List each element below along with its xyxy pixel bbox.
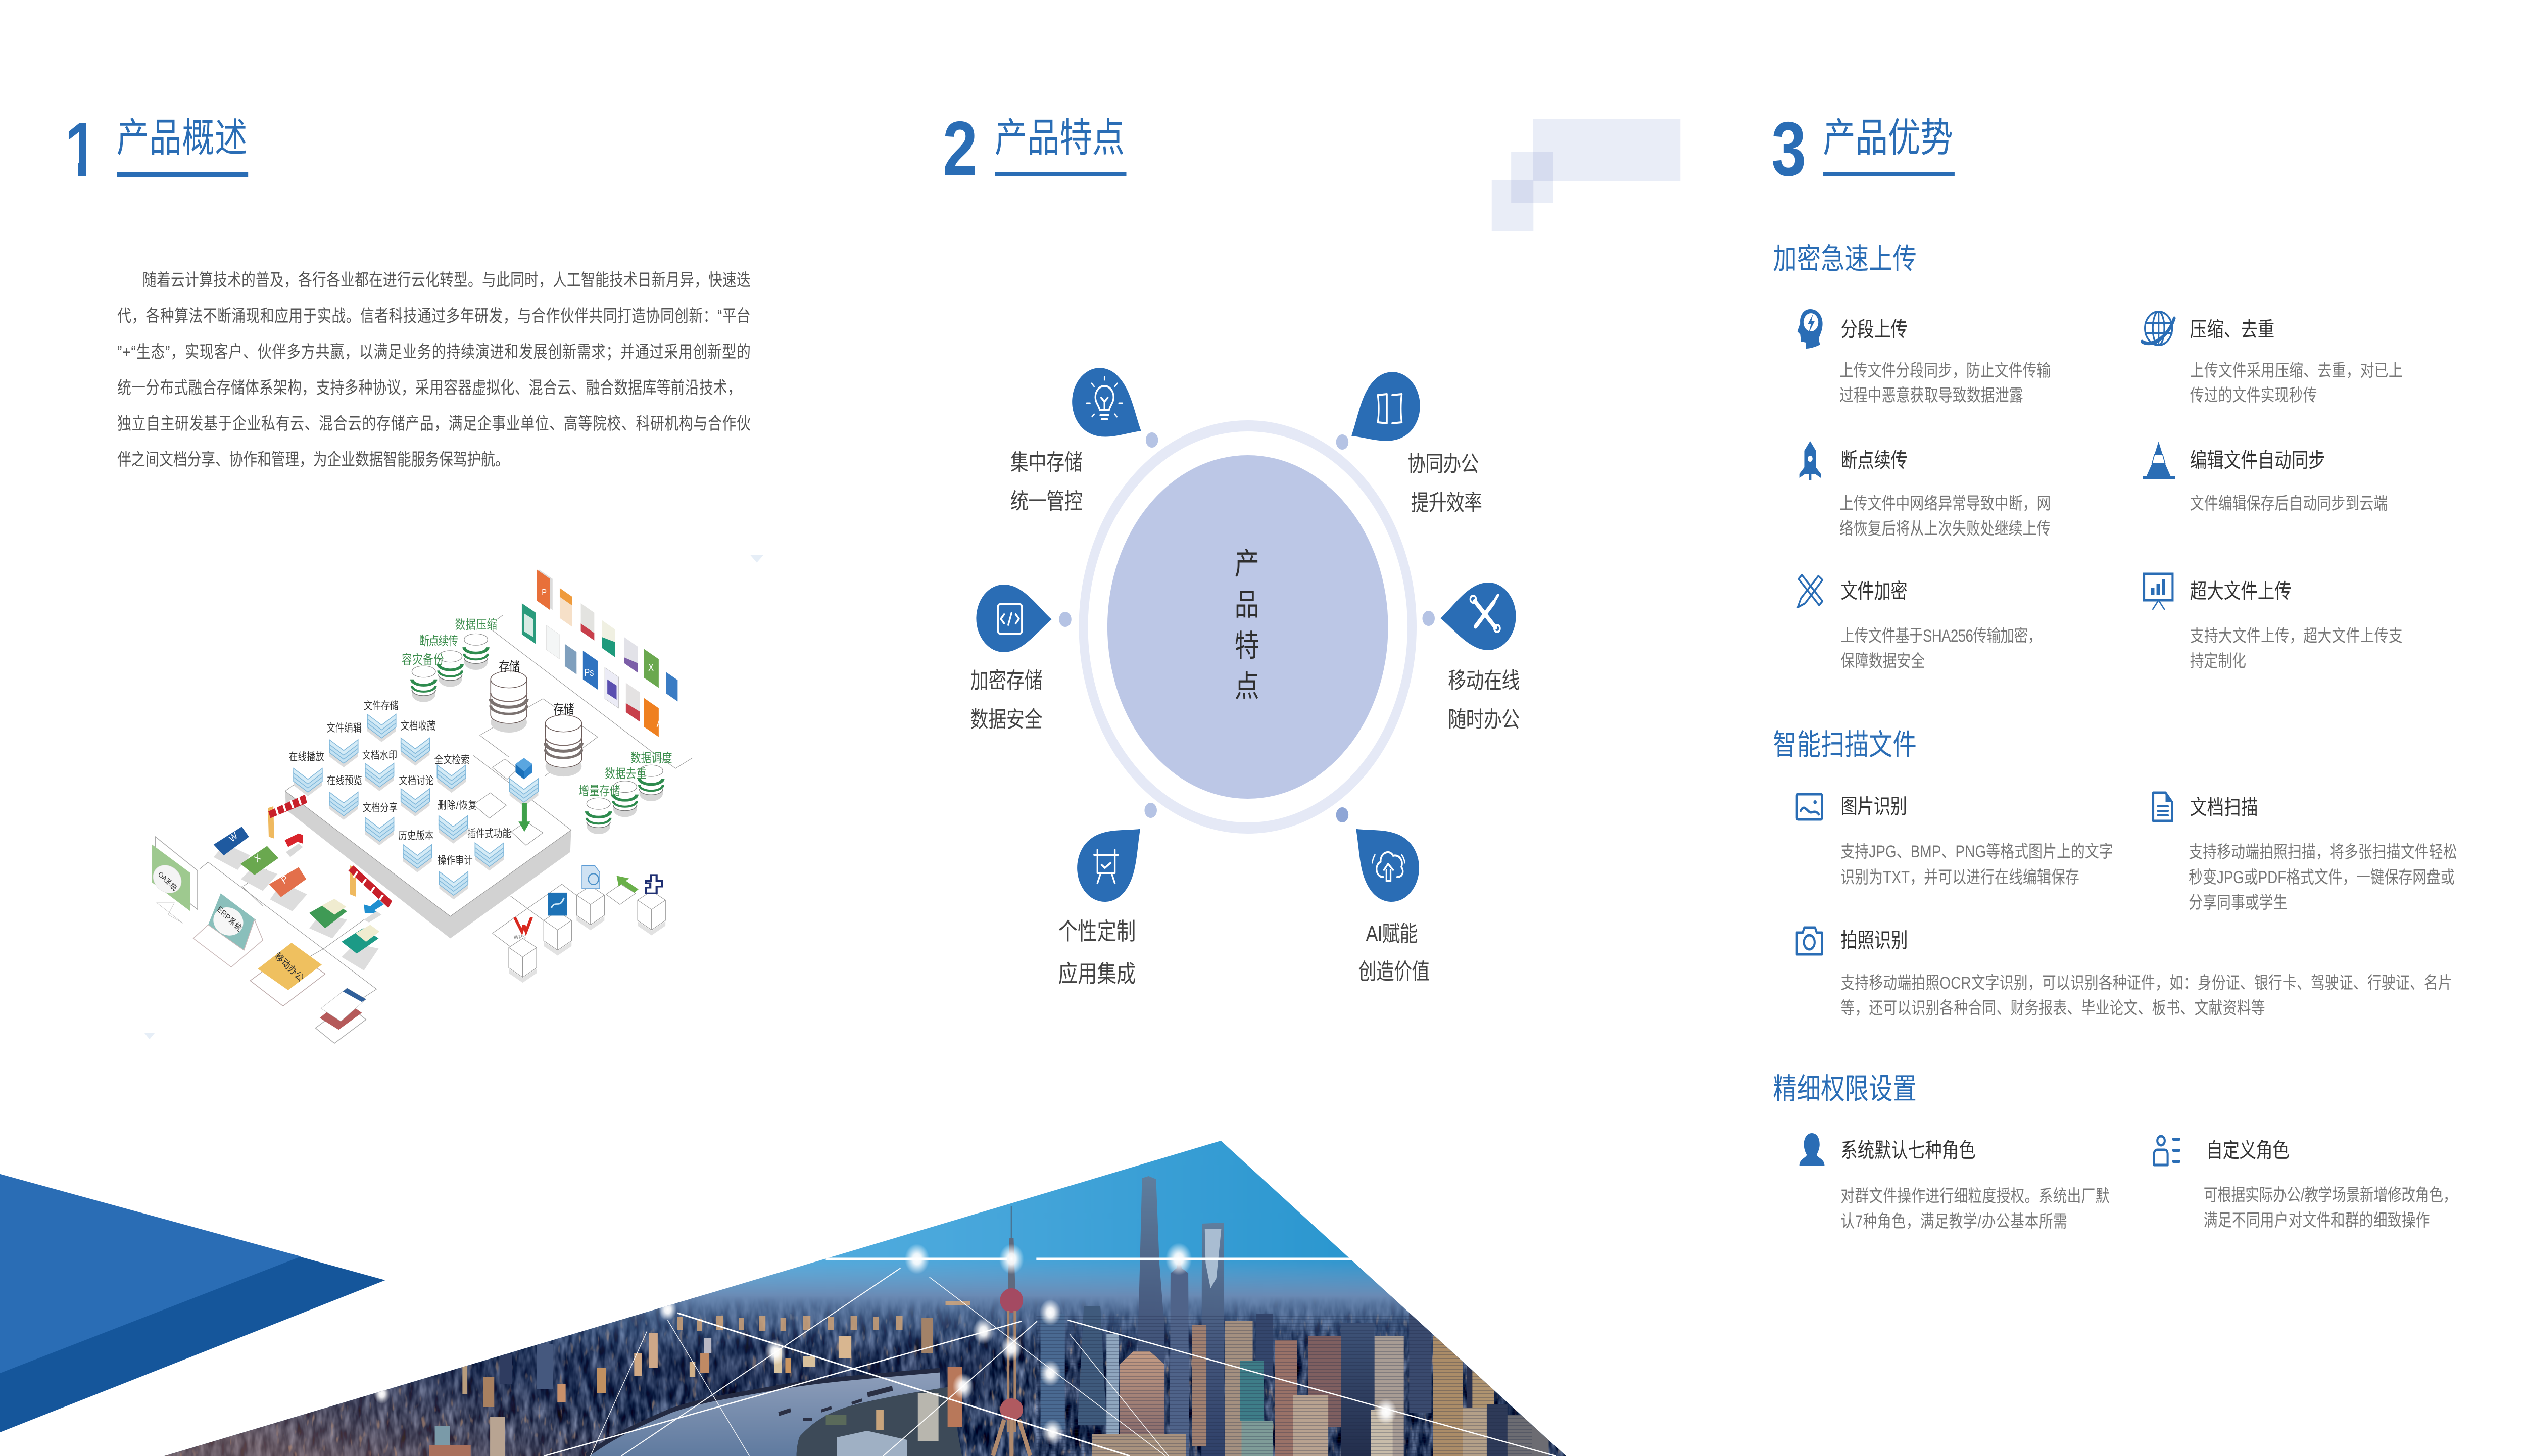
panel: product features: [943, 106, 1680, 988]
center label: [1235, 547, 1259, 703]
diagram labels: 文档分享: [363, 802, 398, 814]
text: 秒变JPG或PDF格式文件，一键保存网盘或: [2189, 867, 2455, 887]
decorative squares: [1492, 119, 1680, 231]
diagram labels: P: [279, 872, 289, 886]
foreground towers: [1040, 1306, 1549, 1456]
icon: pencil and ruler: [1798, 575, 1822, 607]
section number 3: 3: [1771, 106, 1806, 192]
horizon haze: [164, 1258, 1568, 1296]
text: 支持移动端拍照OCR文字识别，可以识别各种证件，如：身份证、银行卡、驾驶证、行驶证、名片: [1840, 973, 2452, 993]
label: 移动在线: [1448, 668, 1520, 693]
drop marker: [1062, 356, 1155, 460]
text: 分享同事或学生: [2189, 893, 2288, 912]
label: 统一管控: [1010, 489, 1083, 514]
text: 文件编辑保存后自动同步到云端: [2190, 494, 2388, 513]
puxi lit towers: [429, 1318, 962, 1456]
diagram labels: 插件式功能: [467, 828, 511, 840]
text: 图片识别: [1840, 795, 1907, 818]
isometric storage architecture diagram: [144, 555, 763, 1043]
group: fine-grained permissions: [1773, 1073, 2457, 1231]
text: 分段上传: [1840, 318, 1908, 341]
storage cylinders: [491, 671, 581, 776]
floating file cards: [214, 827, 379, 970]
icon: globe: [2142, 312, 2174, 345]
feature: encrypted storage: [970, 584, 1052, 732]
connector dots: [1059, 432, 1435, 822]
jin mao tower: [1170, 1253, 1189, 1456]
text: 压缩、去重: [2190, 318, 2274, 341]
label: 个性定制: [1058, 918, 1136, 945]
text: 识别为TXT，并可以进行在线编辑保存: [1840, 867, 2079, 887]
icon: role list: [2154, 1136, 2180, 1165]
center label: 产: [1235, 547, 1259, 581]
barriers: [268, 795, 392, 908]
text: [2190, 579, 2403, 671]
diagram labels: 历史版本: [399, 830, 433, 842]
text: 络恢复后将从上次失败处继续上传: [1839, 519, 2051, 539]
icon: document: [2153, 793, 2172, 821]
text: 编辑文件自动同步: [2190, 449, 2325, 472]
diagram labels: 文件编辑: [326, 722, 362, 734]
section number 1: 1: [64, 107, 100, 192]
left systems: OA, ERP, mobile: [149, 837, 366, 1043]
river boats: [779, 1386, 893, 1421]
drop marker: [1066, 804, 1159, 916]
text: [1839, 449, 2051, 539]
subheading: 智能扫描文件: [1773, 729, 1917, 761]
icon: rocket: [1800, 441, 1821, 480]
icon: presentation chart: [2144, 574, 2172, 609]
integration cubes and icons: [509, 865, 665, 983]
river bank: [587, 1370, 940, 1456]
city texture: [164, 1296, 1568, 1456]
heading: product overview: 产品概述: [116, 116, 248, 161]
label: 数据安全: [970, 707, 1043, 732]
label: [1358, 921, 1430, 984]
text: 支持移动端拍照扫描，将多张扫描文件轻松: [2189, 842, 2457, 862]
group: smart scanning: [1773, 729, 2457, 1018]
text: [2190, 449, 2388, 513]
file type icons: [522, 569, 677, 737]
icon: tools: [1470, 595, 1500, 632]
text: 文档扫描: [2190, 796, 2258, 819]
drop marker: [1337, 804, 1431, 916]
drop marker: [976, 584, 1052, 653]
feature: mobile office: [1440, 581, 1520, 732]
heading underline: [995, 172, 1126, 176]
light flares: [374, 1243, 1397, 1445]
diagram labels: 文件存储: [364, 700, 399, 712]
label: AI赋能: [1366, 921, 1418, 946]
text: 上传文件分段同步，防止文件传输: [1839, 361, 2051, 380]
icon: head with bolt: [1798, 309, 1823, 349]
oriental pearl tower: [993, 1206, 1030, 1456]
text: 保障数据安全: [1840, 651, 1925, 671]
label: 应用集成: [1058, 961, 1136, 988]
diagram labels: OA系统: [157, 870, 178, 893]
diagram labels: 在线播放: [289, 751, 324, 763]
distant lit buildings: [677, 1301, 970, 1331]
blue cube: [515, 758, 532, 779]
label: [1010, 450, 1083, 514]
green data cylinders: [412, 634, 663, 834]
network lines: [544, 1259, 1556, 1456]
text: 上传文件中网络异常导致中断，网: [1839, 494, 2051, 513]
text: 可根据实际办公/教学场景新增修改角色，: [2204, 1185, 2457, 1205]
label: 集中存储: [1010, 450, 1083, 475]
shanghai tower: [1138, 1176, 1165, 1456]
overview paragraph: [117, 270, 751, 469]
diagram shapes: [144, 555, 763, 1043]
icon: picture: [1797, 794, 1822, 819]
diagram labels: 数据压缩: [455, 617, 497, 632]
panel: product advantages: [1771, 106, 2457, 1231]
center label: 点: [1235, 669, 1259, 703]
label: 创造价值: [1358, 959, 1430, 984]
heading: product features: 产品特点: [995, 116, 1125, 161]
text: 断点续传: [1840, 449, 1908, 472]
storage tier outlines: [200, 615, 693, 1018]
icon: person: [1800, 1133, 1824, 1166]
text: 等，还可以识别各种合同、财务报表、毕业论文、板书、文献资料等: [1840, 998, 2265, 1018]
arrows: [285, 803, 639, 923]
diagram labels: 断点续传: [419, 634, 458, 648]
heading underline: [117, 172, 248, 177]
label: 协同办公: [1407, 452, 1479, 476]
feature: collaboration: [1337, 359, 1482, 515]
text: 上传文件采用压缩、去重，对已上: [2190, 361, 2403, 380]
blue chevron decoration: [0, 1174, 385, 1432]
item: document scan: [2153, 793, 2457, 912]
drop marker: [1337, 359, 1430, 465]
text: 满足不同用户对文件和群的细致操作: [2204, 1210, 2430, 1230]
icon: camera: [1797, 928, 1822, 954]
text: 持定制化: [2190, 651, 2246, 671]
text: 过程中恶意获取导致数据泄露: [1839, 385, 2023, 405]
pudong park and museum: [796, 1387, 962, 1456]
faint corner markers: [144, 555, 763, 1039]
feature: AI: [1337, 804, 1431, 984]
diagram labels: 数据调度: [630, 751, 672, 765]
icon: open book: [1378, 394, 1402, 423]
subheading: 加密急速上传: [1773, 243, 1917, 275]
diagram labels: 删除/恢复: [438, 799, 477, 811]
diagram labels: X: [252, 851, 262, 864]
item: auto-sync editing: [2143, 442, 2388, 513]
text: 文件加密: [1840, 579, 1908, 603]
diagram labels: 存储: [553, 702, 574, 717]
text: [1839, 318, 2051, 405]
item: large file upload: [2144, 574, 2403, 671]
center label: 品: [1235, 588, 1259, 622]
diagram labels: 增量存储: [579, 784, 620, 798]
text: 超大文件上传: [2190, 579, 2292, 603]
text: 认7种角色，满足教学/办公基本所需: [1840, 1211, 2067, 1231]
panel: product overview: [64, 107, 763, 1043]
text: 拍照识别: [1840, 929, 1908, 952]
heading underline: [1823, 172, 1955, 176]
label: 提升效率: [1411, 491, 1482, 515]
city tone overlays: [164, 1296, 1568, 1456]
item: image recognition: [1797, 794, 2113, 887]
group: encrypted fast upload: [1773, 243, 2403, 671]
label: [1407, 452, 1482, 515]
icon: light bulb: [1087, 377, 1122, 419]
item: file encryption: [1798, 575, 2042, 671]
text: 上传文件基于SHA256传输加密，: [1840, 626, 2042, 646]
text: [2190, 318, 2403, 405]
diagram labels: W: [227, 829, 239, 844]
overview paragraph: 代，各种算法不断涌现和应用于实战。信者科技通过多年研发，与合作伙伴共同打造协同创新：“平台: [117, 306, 751, 326]
item: default roles: [1800, 1133, 2109, 1231]
label: [1448, 668, 1520, 732]
text: 对群文件操作进行细粒度授权。系统出厂默: [1840, 1186, 2109, 1206]
icon: code window: [998, 604, 1022, 634]
river: [587, 1370, 940, 1456]
world financial center: [1201, 1223, 1225, 1456]
diagram labels: [157, 588, 672, 984]
item: custom roles: [2154, 1136, 2457, 1230]
overview paragraph: 统一分布式融合存储体系架构，支持多种协议，采用容器虚拟化、混合云、融合数据库等前沿技术，: [117, 378, 742, 398]
diagram labels: X: [648, 661, 654, 673]
text: [2189, 796, 2457, 912]
outer ring: [1083, 426, 1412, 828]
section number 2: 2: [943, 106, 978, 191]
diagram labels: 移动办公: [273, 950, 305, 984]
label: 随时办公: [1448, 707, 1520, 732]
label: [1058, 918, 1136, 988]
section number 1: [69, 123, 86, 176]
warm window lights: [164, 1314, 1568, 1456]
text: [1840, 579, 2042, 671]
main platform: [285, 705, 571, 938]
diagram labels: 全文检索: [434, 754, 469, 766]
window stripes: [1036, 1314, 1532, 1456]
drop marker: [1440, 581, 1517, 652]
overview paragraph: 伴之间文档分享、协作和管理，为企业数据智能服务保驾护航。: [117, 450, 509, 469]
city skyline photo triangle: [164, 1141, 1568, 1456]
item: segmented upload: [1798, 309, 2051, 405]
heading: product advantages: 产品优势: [1823, 116, 1953, 161]
center label: 特: [1235, 628, 1259, 663]
overview paragraph: 独立自主研发基于企业私有云、混合云的存储产品，满足企事业单位、高等院校、科研机构与合作伙: [117, 414, 751, 433]
diagram labels: AI: [656, 718, 664, 730]
item: resumable upload: [1800, 441, 2051, 539]
text: 传过的文件实现秒传: [2190, 385, 2317, 405]
text: 自定义角色: [2206, 1139, 2290, 1162]
item: compression: [2142, 312, 2403, 405]
feature stacks: [294, 714, 538, 899]
text: [1840, 795, 2113, 887]
center circle: [1107, 455, 1388, 799]
item: photo recognition: [1797, 928, 2452, 1018]
text: [1840, 929, 2452, 1018]
label: 加密存储: [970, 668, 1043, 693]
diagram labels: P: [542, 588, 547, 597]
text: 支持大文件上传，超大文件上传支: [2190, 626, 2403, 646]
icon: cloud upload: [1373, 852, 1404, 881]
icon: presentation board: [1094, 850, 1118, 883]
overview paragraph: ”+“生态”，实现客户、伙伴多方共赢，以满足业务的持续演进和发展创新需求；并通过采用创新型的: [117, 342, 751, 362]
subheading: 精细权限设置: [1773, 1073, 1917, 1105]
diagram labels: 文档讨论: [399, 774, 434, 787]
diagram labels: 存储: [499, 660, 520, 675]
feature: customization: [1058, 804, 1159, 988]
diagram labels: ERP系统: [216, 904, 243, 934]
icon: traffic cone: [2143, 442, 2175, 479]
text: [1840, 1139, 2109, 1231]
text: 系统默认七种角色: [1840, 1139, 1976, 1162]
diagram labels: 容灾备份: [402, 652, 444, 666]
feature: centralized storage: [1010, 356, 1155, 514]
diagram labels: 数据去重: [605, 766, 647, 781]
sky: [164, 1141, 1568, 1456]
text: 支持JPG、BMP、PNG等格式图片上的文字: [1840, 842, 2113, 861]
overview paragraph: 随着云计算技术的普及，各行各业都在进行云化转型。与此同时，人工智能技术日新月异，快速迭: [142, 270, 751, 290]
label: [970, 668, 1043, 732]
diagram labels: 文档水印: [362, 749, 397, 761]
diagram labels: WPS: [514, 933, 526, 941]
diagram labels: 操作审计: [438, 854, 473, 866]
diagram labels: 文档收藏: [401, 720, 435, 732]
text: [2204, 1139, 2457, 1230]
diagram labels: Ps: [584, 666, 594, 678]
diagram labels: 在线预览: [327, 774, 362, 787]
